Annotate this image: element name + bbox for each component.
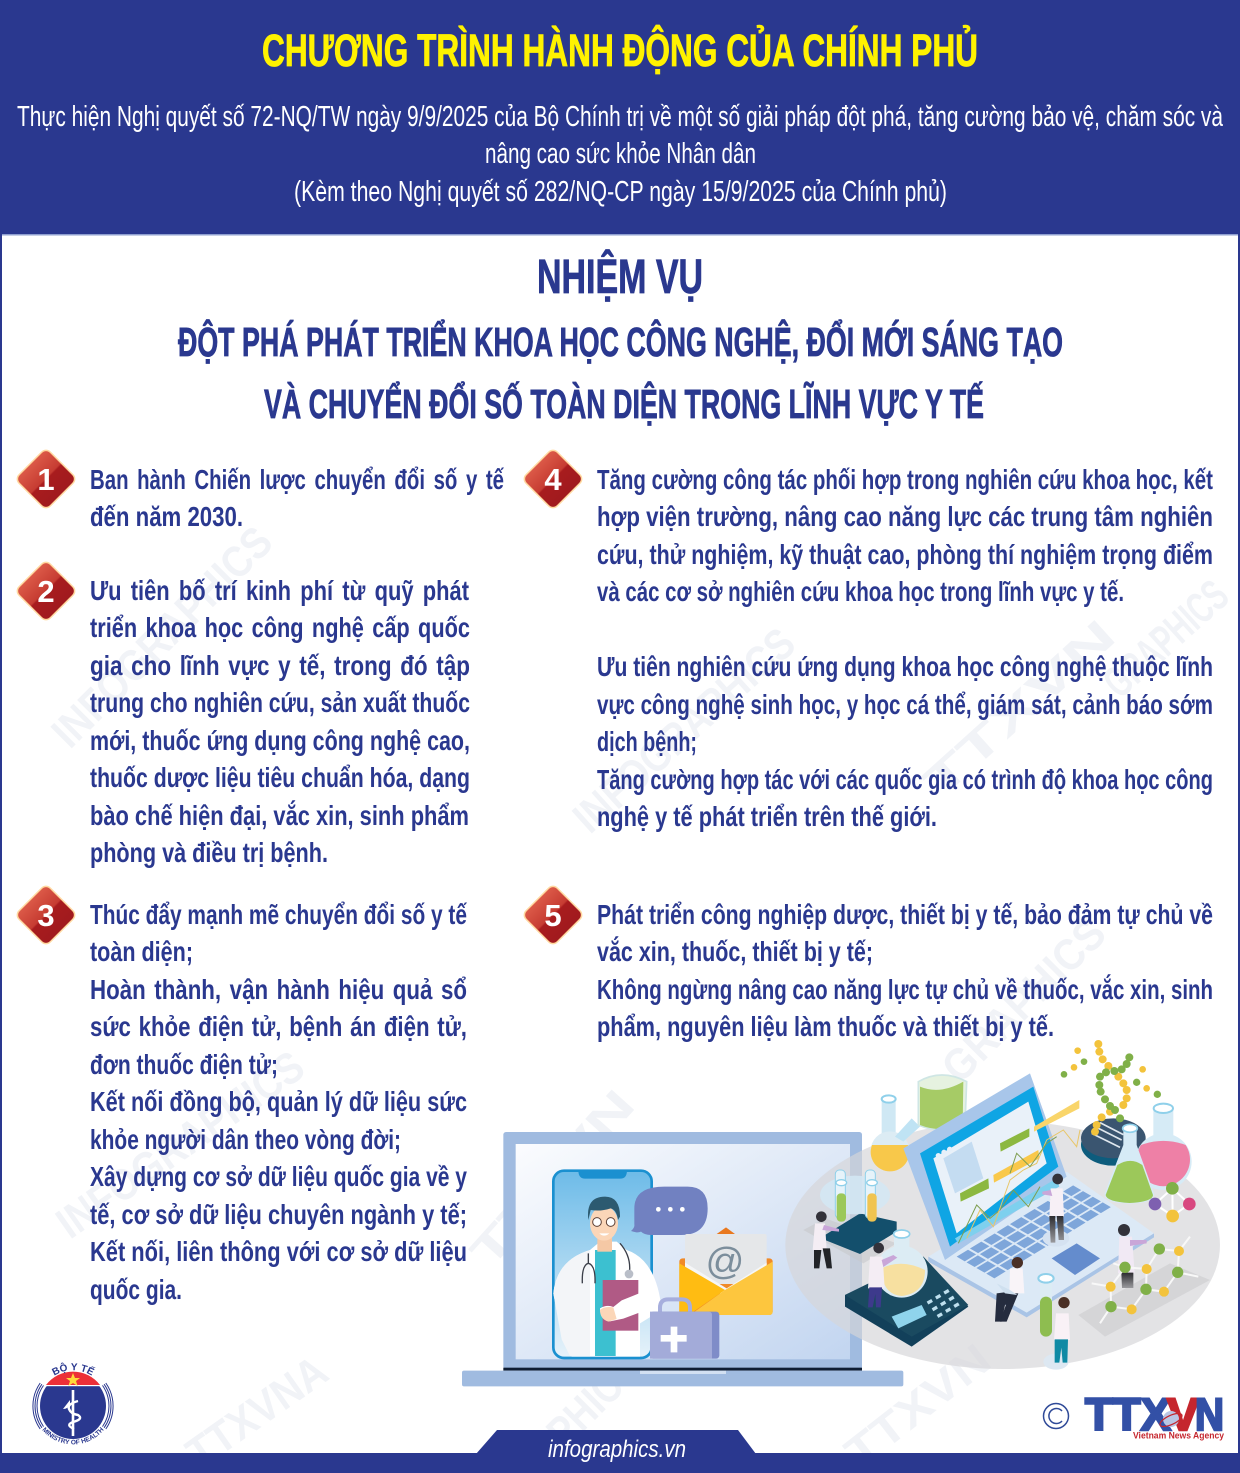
test tube rack	[820, 1170, 897, 1254]
floor ellipse	[785, 1121, 1220, 1369]
text 2: Ưu tiên bố trí kinh phí từ quỹ phát	[90, 575, 469, 606]
figure 4	[995, 1257, 1024, 1322]
item 5	[522, 884, 1213, 1042]
text 3: sức khỏe điện tử, bệnh án điện tử,	[90, 1011, 467, 1042]
logo bottom text: MINISTRY OF HEALTH	[42, 1427, 104, 1444]
illustration: telemedicine laptop	[462, 1132, 903, 1386]
item 1	[15, 448, 504, 532]
laptop	[903, 1073, 1154, 1317]
text 3: Xây dựng cơ sở dữ liệu quốc gia về y	[90, 1161, 467, 1192]
text 2: thuốc dược liệu tiêu chuẩn hóa, dạng	[90, 762, 470, 793]
keyboard	[961, 1188, 1107, 1276]
illustration: research lab on laptop	[785, 1040, 1220, 1370]
laurel stripes	[33, 1383, 113, 1429]
watermarks	[42, 517, 1238, 1473]
text 4: nghệ y tế phát triển trên thế giới.	[597, 801, 937, 832]
text 3: Kết nối đồng bộ, quản lý dữ liệu sức	[90, 1086, 467, 1117]
subtitle	[17, 101, 1223, 208]
text 4: dịch bệnh;	[597, 726, 697, 757]
watermarks: TTXVN	[461, 1080, 645, 1277]
item 3	[15, 884, 467, 1305]
text 5	[597, 899, 1213, 1042]
text 2: mới, thuốc ứng dụng công nghệ cao,	[90, 725, 470, 756]
laptop screen	[516, 1144, 850, 1359]
agency label: Vietnam News Agency	[1133, 1430, 1224, 1440]
doctor	[553, 1197, 662, 1357]
section heading	[178, 249, 1063, 427]
watermarks: TTXVN	[914, 610, 1125, 807]
text 3: khỏe người dân theo vòng đời;	[90, 1124, 401, 1155]
header band	[0, 0, 1240, 236]
figure 2	[868, 1243, 897, 1307]
text 3: đơn thuốc điện tử;	[90, 1049, 278, 1080]
section heading: NHIỆM VỤ	[537, 249, 703, 304]
text 2: phòng và điều trị bệnh.	[90, 837, 328, 868]
watermarks: PHICS	[537, 1345, 650, 1457]
laptop base	[462, 1371, 903, 1386]
badge 5	[522, 884, 584, 946]
text 2: trung cho nghiên cứu, sản xuất thuốc	[90, 687, 470, 718]
balance scale	[845, 1230, 968, 1347]
flask: green conical	[1105, 1124, 1154, 1203]
molecule: top right	[1149, 1182, 1196, 1222]
watermarks: INFOGRAPHICS	[48, 1042, 313, 1248]
footer band	[0, 1430, 1240, 1473]
subtitle: (Kèm theo Nghị quyết số 282/NQ-CP ngày 15/9/2025 của Chính phủ)	[294, 176, 947, 208]
molecule: bottom right	[1092, 1237, 1198, 1323]
phone with doctor	[553, 1170, 662, 1358]
text 2	[90, 575, 470, 868]
text 3: tế, cơ sở dữ liệu chuyên ngành y tế;	[90, 1199, 467, 1230]
globe emblem	[1158, 1411, 1184, 1429]
copyright mark	[1044, 1404, 1068, 1428]
laptop frame	[503, 1132, 862, 1369]
badge 3: 3	[37, 898, 55, 933]
laptop base	[928, 1172, 1154, 1313]
text 3: Hoàn thành, vận hành hiệu quả sổ	[90, 974, 467, 1005]
watermarks: GRAPHICS	[932, 909, 1116, 1092]
text 2: bào chế hiện đại, vắc xin, sinh phẩm	[90, 800, 469, 831]
text 1	[90, 464, 504, 532]
text 2: gia cho lĩnh vực y tế, trong đó tập	[90, 650, 470, 681]
envelope: @	[706, 1240, 744, 1283]
clipboard	[603, 1280, 638, 1331]
text 3: quốc gia.	[90, 1274, 182, 1305]
medical bag	[650, 1299, 719, 1359]
DNA base disc	[1081, 1118, 1146, 1166]
text 2: triển khoa học công nghệ cấp quốc	[90, 612, 470, 643]
wordmark: TTX	[1085, 1389, 1171, 1440]
wordmark: V	[1167, 1389, 1199, 1440]
text 1: Ban hành Chiến lược chuyển đổi số y tế	[90, 464, 504, 495]
text 4	[597, 464, 1213, 832]
item 4	[522, 448, 1213, 832]
badge 3	[15, 884, 77, 946]
badge 4	[522, 448, 584, 510]
figure 5	[1118, 1224, 1147, 1288]
wordmark: N	[1195, 1389, 1224, 1440]
flask: yellow	[871, 1095, 920, 1171]
item 2	[15, 560, 470, 868]
subtitle: nâng cao sức khỏe Nhân dân	[485, 138, 756, 170]
badge 1	[15, 448, 77, 510]
test tube with figure 6	[1038, 1274, 1070, 1370]
envelope	[679, 1227, 773, 1315]
badge 2	[15, 560, 77, 622]
text 3: Thúc đẩy mạnh mẽ chuyển đổi số y tế	[90, 899, 467, 930]
watermarks: INFOGRAPHICS	[564, 619, 805, 842]
DNA helix	[1061, 1040, 1161, 1136]
website: infographics.vn	[548, 1436, 686, 1463]
text 3	[90, 899, 467, 1305]
wordmark	[1085, 1389, 1224, 1440]
emblem oval	[40, 1373, 106, 1439]
figure 3	[1042, 1174, 1069, 1247]
text 5: vắc xin, thuốc, thiết bị y tế;	[597, 936, 873, 967]
watermarks: INFOGRAPHICS	[42, 517, 282, 757]
text 5: phẩm, nguyên liệu làm thuốc và thiết bị y tế.	[597, 1011, 1054, 1042]
badge 4: 4	[544, 462, 562, 497]
logo top text: BỘ Y TẾ	[52, 1362, 96, 1376]
laptop lid	[903, 1073, 1067, 1260]
Ministry of Health logo	[32, 1362, 114, 1444]
text 3: Kết nối, liên thông với cơ sở dữ liệu	[90, 1236, 467, 1267]
rod and serpent	[72, 1390, 74, 1436]
text 1: đến năm 2030.	[90, 501, 243, 532]
beaker: green	[918, 1075, 967, 1130]
TTXVN logo	[1044, 1389, 1224, 1440]
figure 1	[813, 1211, 839, 1268]
badge 1: 1	[37, 462, 55, 497]
badge 2: 2	[37, 574, 55, 609]
speech bubble	[631, 1187, 708, 1235]
text 3: toàn diện;	[90, 936, 193, 967]
badge 5: 5	[544, 898, 562, 933]
flask: pink	[1135, 1104, 1192, 1190]
